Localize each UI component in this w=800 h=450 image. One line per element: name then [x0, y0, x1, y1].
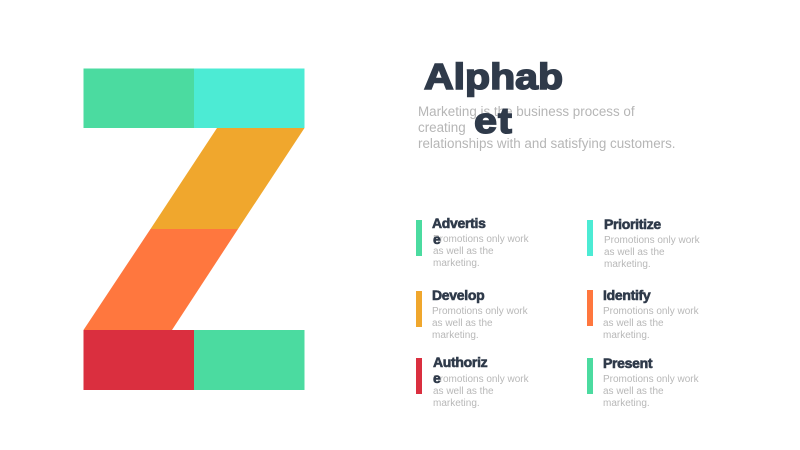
- item: Identify: [587, 287, 699, 341]
- item: Develop: Promotions only work: [432, 306, 528, 317]
- item: Present: [587, 355, 699, 409]
- description: creating: [418, 120, 466, 135]
- item: Identify: Promotions only work: [603, 306, 699, 317]
- item: Authorize: Promotions only work: [433, 374, 529, 385]
- item: Advertise: Promotions only work: [433, 234, 529, 245]
- item: Present: marketing.: [603, 398, 650, 409]
- item: Develop: marketing.: [432, 330, 479, 341]
- item: Present: Present: [603, 355, 652, 371]
- item: Prioritize: Promotions only work: [604, 235, 700, 246]
- title: et: [474, 100, 513, 141]
- description: Marketing is the business process of: [418, 104, 635, 119]
- item: Present: as well as the: [603, 386, 664, 397]
- item: Develop: as well as the: [432, 318, 493, 329]
- item: Prioritize: [587, 216, 700, 270]
- item: Authorize: Authoriz: [433, 354, 487, 370]
- item: Develop: Develop: [432, 287, 484, 303]
- item: Advertise: [416, 215, 529, 269]
- item: Develop: [416, 287, 528, 341]
- title: Alphab: [424, 56, 563, 97]
- item: Identify: marketing.: [603, 330, 650, 341]
- item: Authorize: as well as the: [433, 386, 494, 397]
- item: Authorize: marketing.: [433, 398, 480, 409]
- item: Identify: Identify: [603, 287, 650, 303]
- item: Authorize: e: [433, 370, 440, 386]
- item: Prioritize: marketing.: [604, 259, 651, 270]
- description: [418, 104, 676, 151]
- item: Identify: as well as the: [603, 318, 664, 329]
- item: Advertise: Advertis: [432, 215, 486, 231]
- item: Prioritize: Prioritize: [604, 216, 661, 232]
- item: Advertise: marketing.: [433, 258, 480, 269]
- item: Prioritize: as well as the: [604, 247, 665, 258]
- item: Authorize: [416, 354, 529, 409]
- description: relationships with and satisfying customers.: [418, 136, 676, 151]
- item: Advertise: as well as the: [433, 246, 494, 257]
- item: Present: Promotions only work: [603, 374, 699, 385]
- title: [424, 56, 563, 141]
- item: Advertise: e: [433, 231, 440, 247]
- letter Z graphic: [84, 68, 304, 390]
